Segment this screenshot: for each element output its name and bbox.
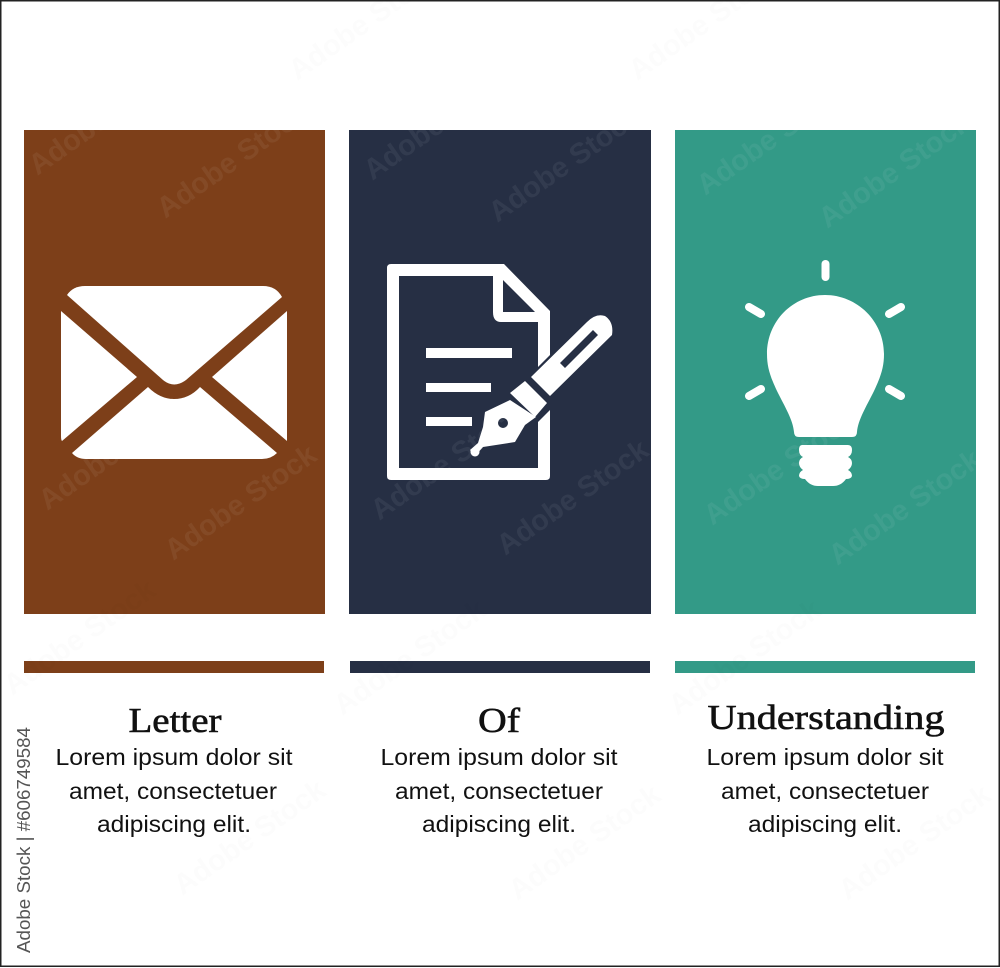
text block: understanding description: adipiscing elit. <box>748 811 902 837</box>
icon: document with fountain pen <box>387 264 612 480</box>
watermark overlay: Adobe Stock <box>691 73 855 202</box>
bar: letter <box>24 661 324 673</box>
watermark overlay: Adobe Stock <box>159 438 323 567</box>
watermark overlay: Adobe Stock <box>358 58 522 187</box>
heading: Letter: Letter <box>128 701 222 740</box>
watermark overlay: Adobe Stock <box>365 398 529 527</box>
watermark overlay: Adobe Stock <box>823 443 987 572</box>
stock id, vertical text: Adobe Stock | #606749584 <box>14 727 34 953</box>
text block: letter description: Lorem ipsum dolor sit <box>56 744 293 770</box>
text block: understanding description <box>706 744 944 837</box>
watermark overlay: Adobe Stock <box>23 53 187 182</box>
icon: envelope <box>61 286 287 459</box>
watermark overlay: Adobe Stock <box>698 403 862 532</box>
watermark overlay: Adobe Stock <box>813 106 977 235</box>
watermark overlay: Adobe Stock <box>151 96 315 225</box>
heading: Of: Of <box>478 701 520 740</box>
text block: of description: adipiscing elit. <box>422 811 576 837</box>
watermark overlay: Adobe Stock <box>483 100 647 229</box>
text block: understanding description: Lorem ipsum dolor sit <box>706 744 944 770</box>
text block: of description: amet, consectetuer <box>395 778 603 804</box>
panel: of <box>349 130 651 614</box>
text block: understanding description: amet, consectetuer <box>721 778 929 804</box>
text block: letter description: adipiscing elit. <box>97 811 251 837</box>
watermark overlay: Adobe Stock <box>491 433 655 562</box>
heading: Understanding: Understanding <box>708 698 944 737</box>
icon: light bulb <box>749 264 901 486</box>
panel: letter <box>24 130 325 614</box>
bar: of <box>350 661 650 673</box>
text block: of description <box>380 744 618 837</box>
text block: of description: Lorem ipsum dolor sit <box>380 744 618 770</box>
text block: letter description: amet, consectetuer <box>69 778 277 804</box>
watermark overlay: Adobe Stock <box>33 388 197 517</box>
bar: understanding <box>675 661 975 673</box>
text block: letter description <box>56 744 293 837</box>
panel: understanding <box>675 130 976 614</box>
